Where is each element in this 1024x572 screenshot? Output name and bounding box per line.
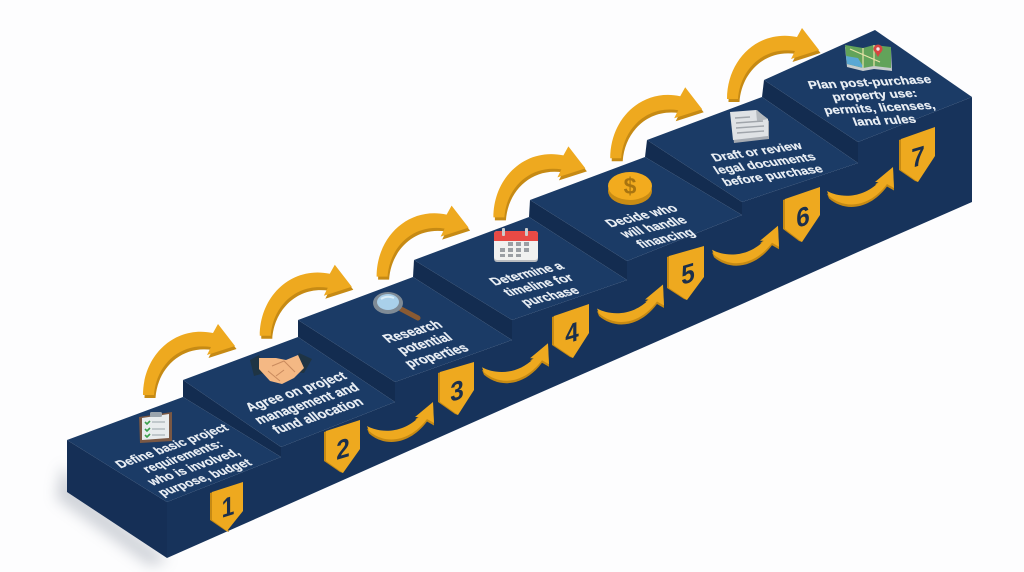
icon: handshake [250,353,312,384]
badge 5: 5 [681,256,695,291]
icon: clipboard [139,412,172,443]
step 2 text: management and [251,380,362,427]
step 2 text: Agree on project [242,369,350,414]
curved arrow 6 to 7 [727,28,820,102]
step 4 text: timeline for [500,271,578,299]
top surfaces [67,30,972,502]
front arrow 4 to 5 [597,284,664,324]
step 7 text: property use: [830,87,919,104]
badge 2: 2 [336,431,350,466]
icon: map [845,44,892,71]
badge 4: 4 [565,315,579,350]
risers [183,80,858,457]
step 5 text: will handle [615,214,691,240]
curved arrow 3 to 4 [377,206,470,280]
badge 3 [438,362,474,415]
step 6 text: legal documents [710,150,819,177]
badge 1: 1 [222,491,234,524]
badge 6: 6 [796,199,810,234]
badge 1 [210,482,243,532]
step 1 text: purpose, budget [154,456,256,499]
step 4 text [486,259,591,310]
curved arrow 1 to 2 [143,324,236,398]
front arrow 2 to 3 [367,402,434,442]
icon: dollar coin: $ [624,173,637,199]
step 4 text: purchase [517,284,583,308]
step 7 text: permits, licenses, [822,99,937,117]
badge 2 [324,420,360,473]
step 1 text: Define basic project [111,421,232,471]
step 3 text: properties [400,340,473,370]
step 7 text: land rules [851,113,918,128]
step 1 text: requirements: [139,437,226,475]
icon: calendar [494,228,538,262]
badge 3: 3 [450,373,464,408]
step 6 text: before purchase [719,162,826,189]
step 5 text: financing [632,226,699,250]
front arrow 3 to 4 [482,343,549,383]
curved arrow 5 to 6 [610,87,704,161]
step 7 text [806,73,948,130]
step 1 text [111,421,265,502]
step 4 text: Determine a [486,259,568,288]
step 5 text [602,202,705,252]
step 2 text: fund allocation [269,395,367,436]
curved arrow 4 to 5 [493,146,587,220]
badge 4 [552,304,589,358]
badge 6 [783,187,820,242]
badge 7: 7 [911,139,925,174]
left face of step 1 [67,440,167,558]
front arrow 5 to 6 [712,226,779,266]
step 6 text: Draft or review [708,139,805,164]
icon: dollar coin [608,172,652,205]
icon: magnifying glass [373,292,418,318]
step 1 text: who is involved, [143,446,243,488]
step 2 text [240,368,373,439]
curved arrow 2 to 3 [260,265,353,339]
step 7 text: Plan post-purchase [806,73,933,92]
badge 5 [667,246,704,300]
front faces [167,97,972,558]
step 3 text [376,316,473,370]
front arrow 6 to 7 [827,167,894,207]
icon: document [730,110,769,143]
step 6 text [702,138,826,189]
step 3 text: potential [393,330,456,357]
step 5 text: Decide who [602,202,681,230]
badge 7 [899,127,935,182]
step 3 text: Research [378,317,446,345]
